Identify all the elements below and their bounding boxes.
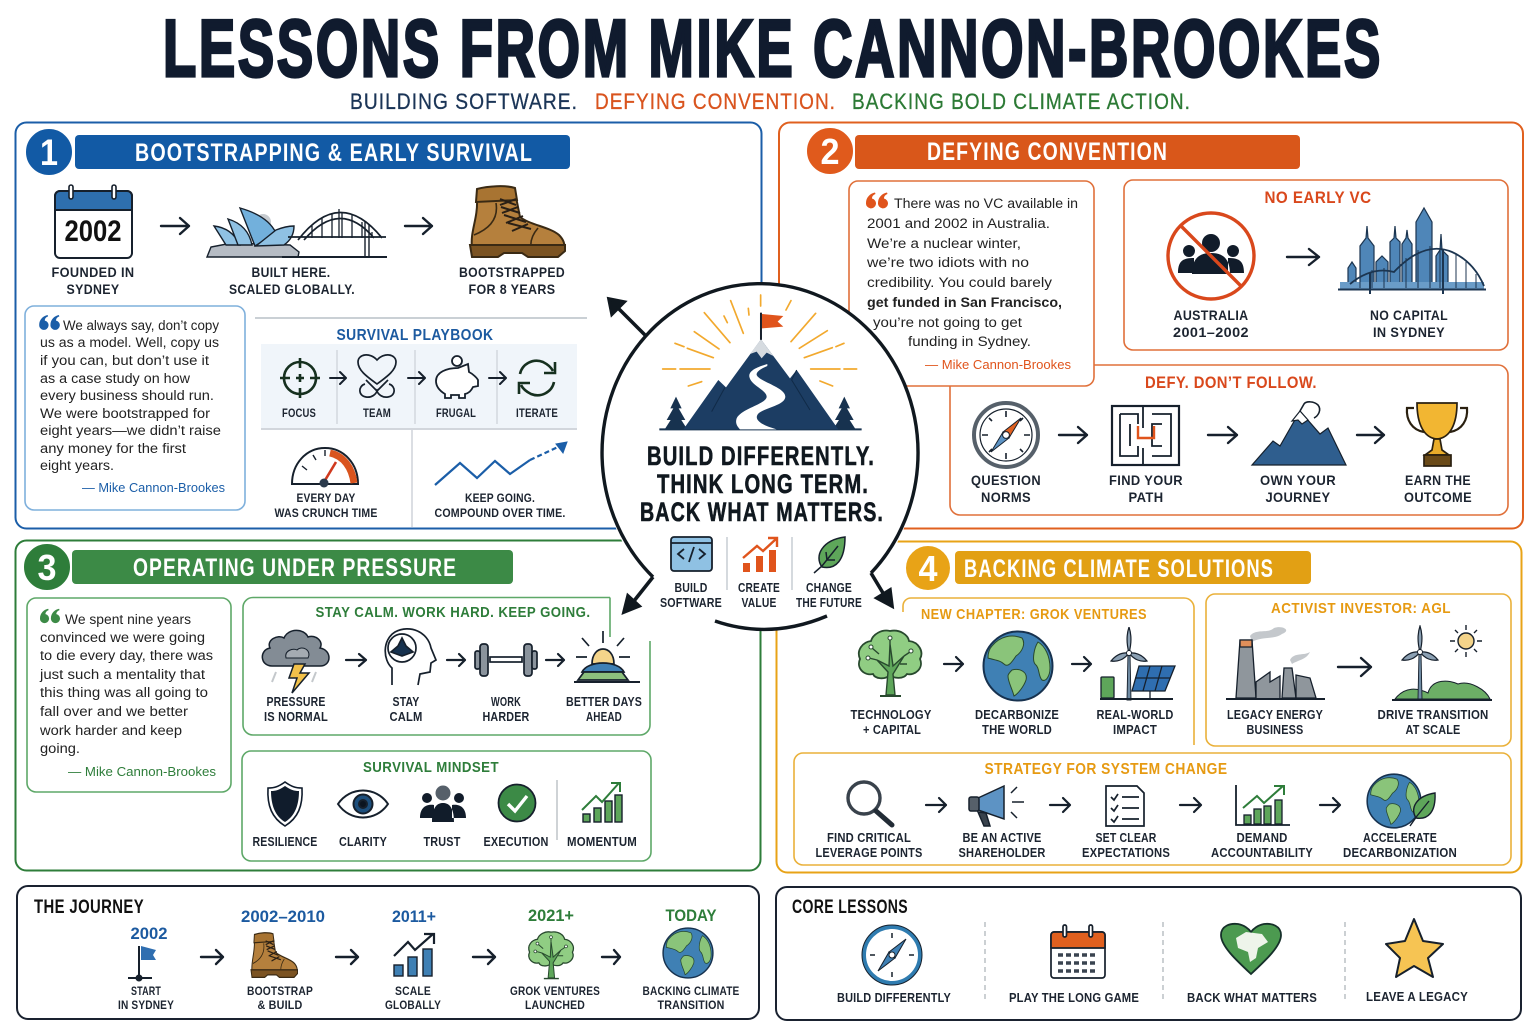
no VC labels: 2001–2002 — [1173, 324, 1249, 340]
quote text: eight years. — [40, 458, 114, 473]
emblem statement — [640, 441, 884, 527]
strategy labels: LEVERAGE POINTS — [816, 846, 922, 860]
stay calm flow — [243, 598, 650, 735]
journey heading: THE JOURNEY — [34, 897, 144, 918]
new chapter labels: IMPACT — [1113, 723, 1157, 737]
icon: piggy bank — [436, 356, 478, 398]
lesson: play the long game: PLAY THE LONG GAME — [1009, 991, 1139, 1005]
icon: target — [280, 358, 320, 398]
activist labels: DRIVE TRANSITION — [1378, 708, 1488, 722]
defy box outline — [950, 365, 1508, 515]
step: 2021+ grok: 2021+ — [528, 906, 574, 925]
section 2 banner — [806, 127, 1300, 175]
step: 2002 start: IN SYDNEY — [118, 1000, 174, 1012]
no early VC box — [1124, 180, 1508, 350]
icon: sunrise — [574, 631, 640, 682]
section 1 banner — [25, 128, 570, 176]
quote text: this thing was all going to — [40, 685, 208, 700]
step: today — [642, 906, 740, 1012]
icon: quote mark — [40, 609, 60, 623]
strategy labels — [816, 831, 1457, 860]
arrow — [1320, 798, 1340, 812]
step: 2002-2010 bootstrap: 2002–2010 — [241, 907, 325, 926]
section 4 banner — [905, 545, 1311, 591]
subtitle — [350, 89, 1191, 114]
no VC heading: NO EARLY VC — [1264, 188, 1372, 207]
labels for founding row — [52, 264, 565, 297]
stay calm labels: BETTER DAYS — [566, 695, 642, 709]
quote text — [39, 612, 213, 756]
new chapter labels: + CAPITAL — [863, 723, 921, 737]
quote: no VC available — [866, 192, 1078, 372]
quote text: We spent nine years — [65, 612, 191, 627]
quote text: funding in Sydney. — [908, 334, 1031, 349]
quote text — [40, 318, 221, 473]
strategy labels: DECARBONIZATION — [1343, 846, 1457, 860]
icon: sydney skyline — [1338, 208, 1486, 294]
playbook labels — [282, 408, 558, 420]
step: 2021+ grok: GROK VENTURES — [510, 986, 600, 998]
panel 2 content — [866, 180, 1508, 505]
lesson: play the long game — [1009, 925, 1139, 1005]
stay calm labels: IS NORMAL — [264, 710, 328, 724]
quote text: any money for the first — [40, 441, 186, 456]
playbook labels: FRUGAL — [436, 408, 476, 420]
mindset labels: RESILIENCE — [252, 835, 318, 849]
mindset labels: MOMENTUM — [567, 835, 637, 849]
defy heading: DEFY. DON’T FOLLOW. — [1145, 373, 1317, 392]
icon: gauge — [292, 448, 358, 488]
panel 4 frames — [794, 594, 1511, 865]
labels: every day — [274, 493, 378, 520]
arrow — [1208, 427, 1237, 443]
arrow — [1180, 798, 1201, 812]
arrow — [336, 950, 358, 964]
icon: checklist — [1106, 786, 1144, 826]
quote text: convinced we were going — [40, 630, 205, 645]
panel 3: operating under pressure — [23, 543, 651, 861]
arrow — [489, 372, 506, 384]
icon: accountability chart — [1236, 785, 1290, 825]
new chapter labels: REAL-WORLD — [1096, 708, 1174, 722]
defy labels — [971, 472, 1472, 505]
icon: eye — [338, 790, 388, 818]
section 3 banner: OPERATING UNDER PRESSURE — [133, 554, 457, 582]
defy labels: NORMS — [981, 489, 1031, 505]
quote card outline — [849, 181, 1094, 386]
new chapter labels: THE WORLD — [982, 723, 1052, 737]
survival mindset — [242, 751, 651, 861]
step: 2002 start: START — [131, 986, 161, 998]
playbook labels: FOCUS — [282, 408, 316, 420]
no VC labels: NO CAPITAL — [1370, 307, 1448, 323]
icon: mountain summit — [1252, 402, 1346, 465]
step: 2002-2010 bootstrap — [241, 907, 325, 1012]
icon: quote mark — [866, 192, 888, 208]
defy labels: OUTCOME — [1404, 489, 1472, 505]
new chapter labels — [850, 708, 1174, 737]
icon: maze — [1112, 406, 1179, 465]
icon: quote mark — [39, 315, 60, 330]
step: 2011+ scale: 2011+ — [392, 907, 436, 926]
lesson: leave a legacy: LEAVE A LEGACY — [1366, 990, 1468, 1004]
arrow — [1357, 427, 1384, 443]
arrow — [330, 372, 346, 384]
arrow — [1338, 658, 1371, 676]
defy labels: FIND YOUR — [1109, 472, 1183, 488]
strategy labels: SHAREHOLDER — [958, 846, 1046, 860]
icon: trophy — [1407, 403, 1467, 466]
labels for founding row: BOOTSTRAPPED — [459, 264, 565, 280]
strategy labels: ACCOUNTABILITY — [1211, 846, 1313, 860]
quote text: to die every day, there was — [40, 648, 213, 663]
section 2 banner: DEFYING CONVENTION — [927, 138, 1168, 166]
arrow — [944, 657, 963, 671]
subtitle: DEFYING CONVENTION. — [595, 89, 836, 114]
icon: linked hearts — [358, 355, 396, 397]
section 1 banner: 1 — [40, 132, 58, 173]
arrow: to panel 1 — [609, 299, 645, 335]
strategy labels: EXPECTATIONS — [1082, 846, 1170, 860]
activist labels: LEGACY ENERGY — [1227, 708, 1323, 722]
defy labels: OWN YOUR — [1260, 472, 1336, 488]
playbook labels: ITERATE — [516, 408, 558, 420]
icon: boot — [470, 186, 565, 257]
quote text: credibility. You could barely — [867, 275, 1052, 290]
quote text: we’re two idiots with no — [866, 255, 1029, 270]
quote text: eight years—we didn’t raise — [40, 423, 221, 438]
activist labels — [1227, 708, 1488, 737]
emblem statement: BUILD DIFFERENTLY. — [647, 441, 875, 471]
icon: dumbbell — [475, 644, 537, 676]
step: today: BACKING CLIMATE — [642, 986, 740, 998]
arrow: to panel 3 — [624, 577, 653, 612]
emblem labels: VALUE — [742, 596, 776, 610]
icon: shield — [268, 782, 302, 826]
quote card: do not copy us — [25, 306, 245, 510]
icon: globe with leaf — [1367, 774, 1435, 828]
labels: keep going: COMPOUND OVER TIME. — [434, 508, 566, 520]
quote text: get funded in San Francisco, — [867, 295, 1062, 310]
icon: no investors — [1168, 213, 1254, 299]
mindset labels: CLARITY — [339, 835, 387, 849]
icon: magnifier — [848, 782, 892, 825]
icon: momentum chart — [582, 783, 622, 822]
icon: turbine and sun — [1392, 625, 1492, 700]
defy labels: EARN THE — [1405, 472, 1471, 488]
lesson: build differently — [837, 925, 951, 1005]
quote text: We were bootstrapped for — [40, 406, 211, 421]
strategy flow — [816, 761, 1457, 860]
central emblem — [602, 284, 918, 630]
quote text: fall over and we better — [40, 704, 189, 719]
panel: core lessons — [776, 887, 1521, 1020]
icon: globe — [984, 632, 1052, 700]
arrow — [473, 950, 495, 964]
emblem disc and outline — [602, 284, 918, 630]
quote text: There was no VC available in — [894, 196, 1078, 211]
icon: tech tree — [859, 631, 921, 696]
strategy labels: ACCELERATE — [1363, 831, 1437, 845]
section 3 banner: 3 — [38, 547, 56, 588]
playbook labels: TEAM — [363, 408, 391, 420]
step: 2002 start: 2002 — [130, 924, 168, 943]
icon: calendar 2002 — [55, 185, 132, 258]
arrow — [546, 654, 564, 666]
icon: execution check — [498, 784, 536, 822]
arrow — [1050, 798, 1070, 812]
no VC labels — [1173, 307, 1448, 340]
arrow: to panel 4 — [871, 573, 892, 606]
emblem labels: SOFTWARE — [660, 596, 722, 610]
emblem statement: THINK LONG TERM. — [657, 469, 869, 499]
quote text: every business should run. — [40, 388, 214, 403]
quote text: We always say, don’t copy — [63, 318, 219, 333]
defy labels: JOURNEY — [1266, 489, 1331, 505]
labels for founding row: SYDNEY — [66, 281, 120, 297]
panel 4: backing climate solutions — [816, 545, 1492, 860]
new chapter labels: DECARBONIZE — [975, 708, 1059, 722]
stay calm labels: PRESSURE — [266, 695, 326, 709]
attribution: — Mike Cannon-Brookes — [82, 480, 225, 495]
mindset labels — [252, 835, 637, 849]
icon: compass — [974, 403, 1038, 467]
step: 2021+ grok: LAUNCHED — [525, 1000, 585, 1012]
icon: leaf — [814, 537, 845, 573]
section 1 banner: BOOTSTRAPPING & EARLY SURVIVAL — [135, 139, 533, 167]
new chapter labels: TECHNOLOGY — [850, 708, 932, 722]
stay calm labels — [264, 695, 642, 724]
emblem labels: BUILD — [674, 581, 708, 595]
quote text: 2001 and 2002 in Australia. — [867, 216, 1050, 231]
lesson: leave a legacy — [1366, 919, 1468, 1004]
section 3 banner — [23, 543, 513, 591]
quote text: work harder and keep — [39, 723, 182, 738]
quote text — [866, 196, 1078, 349]
step: 2002-2010 bootstrap: BOOTSTRAP — [247, 986, 313, 998]
icon: storm cloud — [262, 630, 329, 693]
step: today: TODAY — [666, 906, 717, 925]
step: 2021+ grok — [510, 906, 600, 1012]
labels: keep going: KEEP GOING. — [465, 493, 535, 505]
labels: every day: EVERY DAY — [296, 493, 356, 505]
no VC labels: IN SYDNEY — [1373, 324, 1445, 340]
quote text: We’re a nuclear winter, — [867, 236, 1021, 251]
defy labels: PATH — [1128, 489, 1164, 505]
quote text: going. — [40, 741, 80, 756]
labels: keep going — [434, 493, 566, 520]
quote text: if you can, but don’t use it — [40, 353, 209, 368]
attribution: — Mike Cannon-Brookes — [925, 357, 1071, 372]
section 4 banner: 4 — [918, 548, 938, 589]
defy flow — [971, 373, 1472, 505]
panel frames — [16, 122, 1523, 872]
strategy labels: FIND CRITICAL — [827, 831, 911, 845]
subtitle: BACKING BOLD CLIMATE ACTION. — [852, 89, 1191, 114]
quote text: us as a model. Well, copy us — [40, 335, 219, 350]
icon: people — [420, 786, 466, 822]
panel 1: bootstrapping and early survival — [25, 128, 587, 527]
arrow — [1072, 657, 1091, 671]
lesson: back what matters — [1187, 924, 1317, 1005]
survival playbook — [255, 318, 587, 527]
activist investor flow — [1226, 600, 1492, 737]
labels: every day: WAS CRUNCH TIME — [274, 508, 378, 520]
mindset labels: TRUST — [424, 835, 461, 849]
strategy labels: DEMAND — [1236, 831, 1288, 845]
activist labels: BUSINESS — [1246, 723, 1304, 737]
step: today: TRANSITION — [658, 1000, 724, 1012]
icon: iterate — [519, 361, 555, 395]
stay calm labels: STAY — [392, 695, 420, 709]
defy labels: QUESTION — [971, 472, 1041, 488]
icon: code window — [671, 537, 712, 571]
icon: value chart — [743, 538, 777, 572]
chart: compound growth — [435, 442, 567, 485]
core lessons heading: CORE LESSONS — [792, 897, 908, 918]
icon: turbine solar battery — [1100, 627, 1175, 700]
strategy labels: SET CLEAR — [1096, 831, 1156, 845]
labels for founding row: BUILT HERE. — [252, 264, 330, 280]
stay calm heading: STAY CALM. WORK HARD. KEEP GOING. — [316, 604, 590, 621]
new chapter flow — [850, 606, 1175, 737]
arrow — [1287, 249, 1319, 265]
quote card: nine years — [27, 598, 231, 792]
step: 2011+ scale — [385, 907, 441, 1012]
step: 2011+ scale: GLOBALLY — [385, 1000, 441, 1012]
icon: mountain with flag and rays — [659, 295, 862, 429]
arrow — [408, 372, 425, 384]
lesson: build differently: BUILD DIFFERENTLY — [837, 991, 951, 1005]
stay calm labels: WORK — [491, 695, 521, 709]
section 4 banner: BACKING CLIMATE SOLUTIONS — [964, 555, 1274, 583]
mindset heading: SURVIVAL MINDSET — [363, 759, 499, 776]
stay calm labels: AHEAD — [586, 710, 622, 724]
stay calm labels: CALM — [390, 710, 422, 724]
playbook heading: SURVIVAL PLAYBOOK — [336, 327, 494, 344]
activist labels: AT SCALE — [1406, 723, 1460, 737]
panel: the journey — [17, 886, 759, 1019]
emblem labels: CHANGE — [806, 581, 852, 595]
emblem labels — [660, 581, 862, 610]
section 2 banner: 2 — [820, 131, 840, 172]
arrow — [926, 798, 946, 812]
new chapter heading: NEW CHAPTER: GROK VENTURES — [921, 606, 1147, 623]
labels for founding row: SCALED GLOBALLY. — [229, 281, 355, 297]
quote text: just such a mentality that — [39, 667, 205, 682]
step: 2002-2010 bootstrap: & BUILD — [258, 1000, 302, 1012]
quote text: as a case study on how — [40, 371, 190, 386]
arrow — [161, 218, 189, 234]
quote text: you’re not going to get — [873, 315, 1022, 330]
arrow — [447, 654, 465, 666]
icon: factory — [1226, 627, 1325, 699]
step: 2002 start — [118, 924, 174, 1012]
icon: calm head — [385, 629, 436, 685]
strategy heading: STRATEGY FOR SYSTEM CHANGE — [984, 761, 1228, 778]
arrow — [602, 950, 620, 964]
stay calm labels: HARDER — [482, 710, 530, 724]
activist heading: ACTIVIST INVESTOR: AGL — [1271, 600, 1451, 617]
no VC labels: AUSTRALIA — [1174, 307, 1248, 323]
labels for founding row: FOR 8 YEARS — [468, 281, 556, 297]
arrow — [201, 950, 223, 964]
subtitle: BUILDING SOFTWARE. — [350, 89, 578, 114]
lesson: back what matters: BACK WHAT MATTERS — [1187, 991, 1317, 1005]
labels for founding row: FOUNDED IN — [52, 264, 134, 280]
step: 2011+ scale: SCALE — [395, 986, 431, 998]
icon: calendar 2002: 2002 — [64, 215, 122, 248]
attribution: — Mike Cannon-Brookes — [68, 764, 217, 779]
emblem labels: THE FUTURE — [796, 596, 862, 610]
emblem statement: BACK WHAT MATTERS. — [640, 497, 884, 527]
panel 2: defying convention — [806, 127, 1508, 515]
icon: megaphone — [969, 786, 1024, 826]
emblem labels: CREATE — [738, 581, 780, 595]
strategy labels: BE AN ACTIVE — [962, 831, 1042, 845]
arrow — [405, 218, 432, 234]
arrow — [346, 654, 366, 666]
arrow — [1059, 427, 1087, 443]
icon: sydney opera house and harbour bridge — [207, 208, 387, 257]
mindset labels: EXECUTION — [484, 835, 548, 849]
